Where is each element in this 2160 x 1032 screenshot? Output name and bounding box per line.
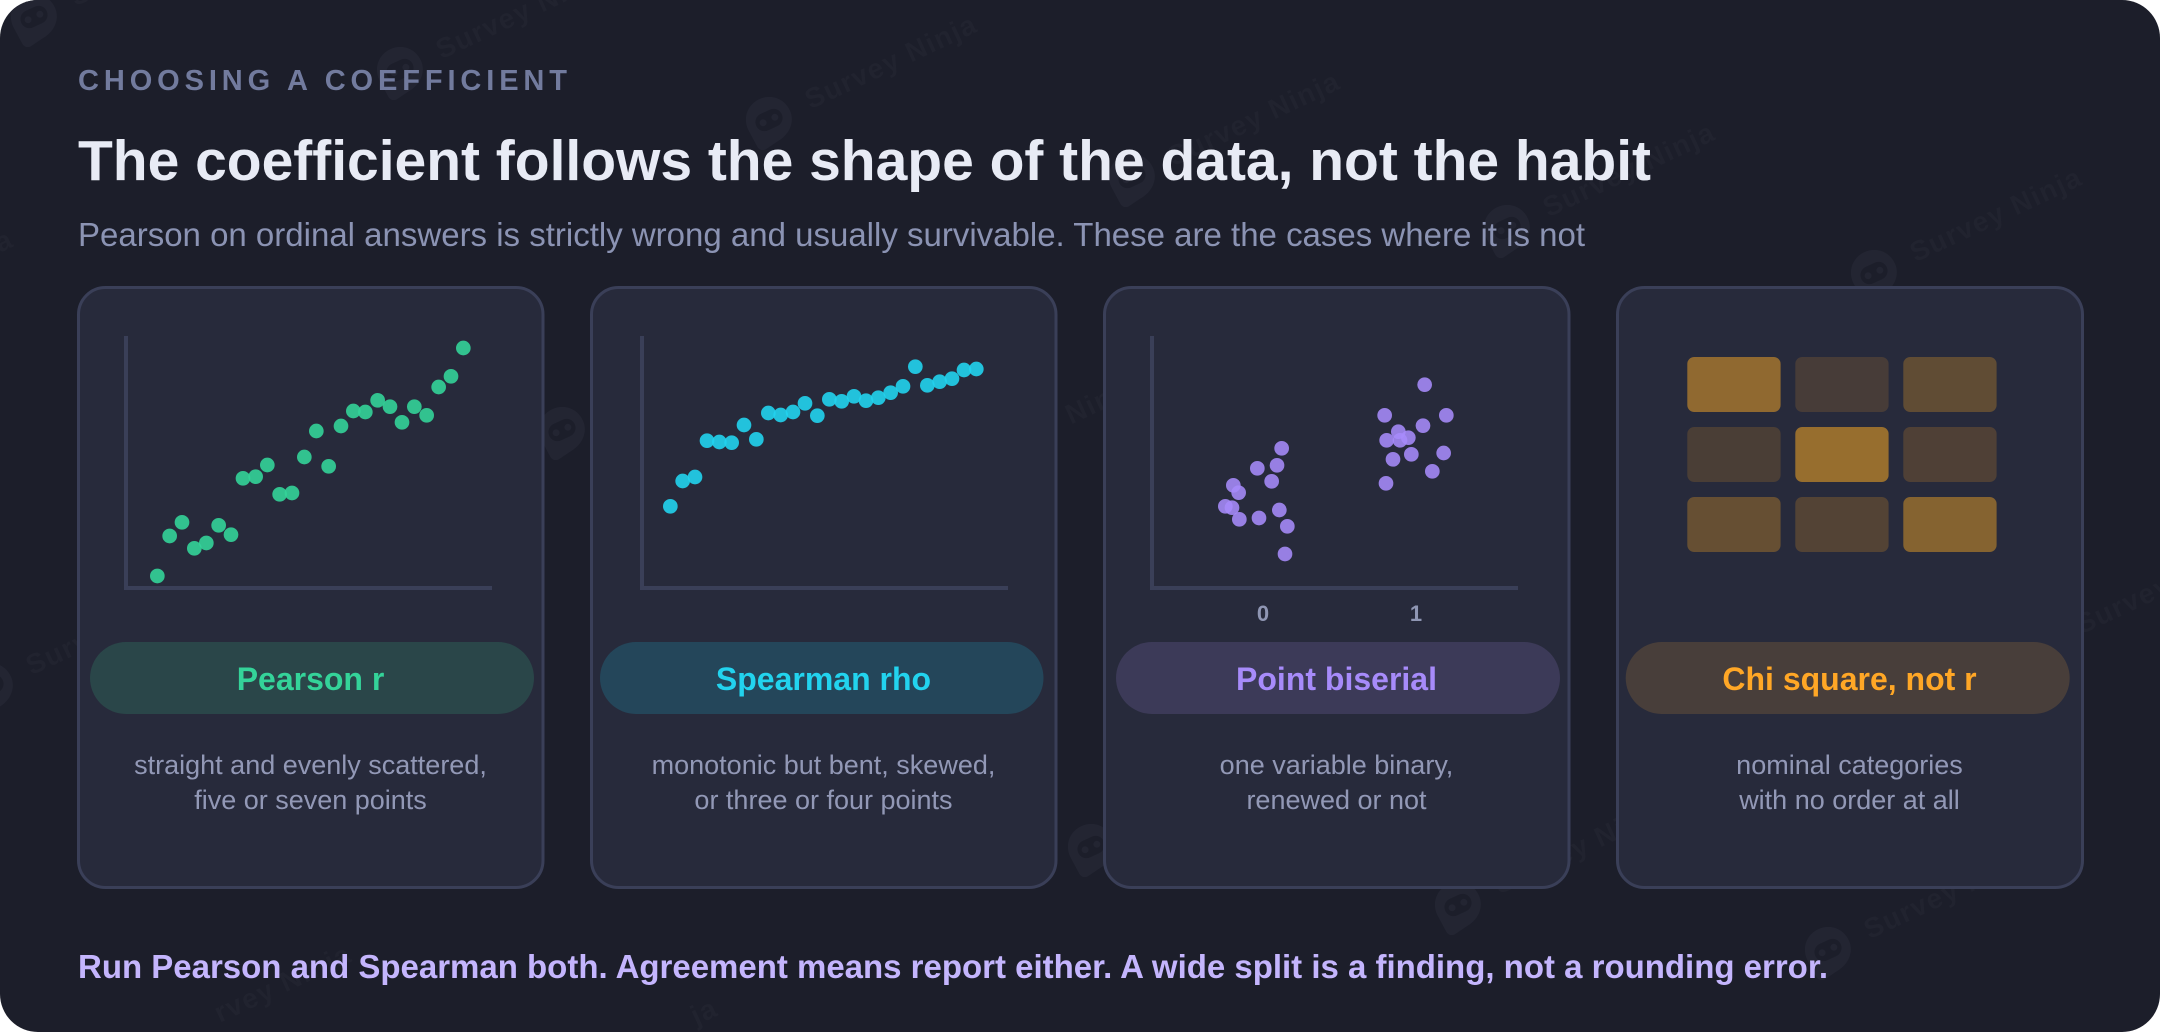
panel: spearman rho xyxy=(592,288,1056,888)
pill: pearson r: Pearson r xyxy=(237,661,384,697)
description: pearson r xyxy=(134,750,487,815)
watermark layer: Survey Ninja xyxy=(1163,65,1345,172)
pill: pearson r xyxy=(90,642,534,714)
panel: chi square xyxy=(1618,288,2082,888)
watermark layer: Survey Ninja xyxy=(593,318,775,425)
chart: two-group strip plot xyxy=(1152,336,1518,626)
watermark layer: Survey Ninja xyxy=(1122,735,1304,842)
watermark layer: Survey Ninja xyxy=(1905,161,2087,268)
chart: monotonic curve scatter xyxy=(642,336,1008,588)
description: point biserial xyxy=(1220,750,1453,815)
watermark layer: Survey Ninja xyxy=(960,370,1142,477)
pill: spearman rho xyxy=(600,642,1044,714)
chart: two-group strip plot: 1 xyxy=(1410,601,1422,626)
chart: linear scatter xyxy=(126,336,492,588)
chart: two-group strip plot: 0 xyxy=(1257,601,1269,626)
description: chi square: with no order at all xyxy=(1738,785,1960,815)
eyebrow: CHOOSING A COEFFICIENT xyxy=(78,65,567,97)
description: pearson r: five or seven points xyxy=(194,785,427,815)
footer takeaway: Run Pearson and Spearman both. Agreement means report either. A wide split is a finding, not a rounding error. xyxy=(78,948,1828,985)
description: pearson r: straight and evenly scattered, xyxy=(134,750,487,780)
watermark layer xyxy=(12,0,1448,713)
panel: point biserial xyxy=(1104,288,1569,888)
chart: contingency grid xyxy=(1687,357,1997,552)
pill: point biserial: Point biserial xyxy=(1236,661,1437,697)
description: point biserial: one variable binary, xyxy=(1220,750,1453,780)
watermark layer: Survey Ninja xyxy=(1489,793,1671,900)
description: point biserial: renewed or not xyxy=(1246,785,1427,815)
pill: chi square xyxy=(1626,642,2070,714)
description: spearman rho: or three or four points xyxy=(694,785,953,815)
pill: chi square: Chi square, not r xyxy=(1722,661,1977,697)
watermark layer: ja xyxy=(685,992,722,1031)
watermark layer: Survey Ninja xyxy=(21,574,203,681)
description: chi square xyxy=(1736,750,1963,815)
description: chi square: nominal categories xyxy=(1736,750,1963,780)
panel: pearson r xyxy=(78,288,543,888)
watermark layer: Survey Ninja xyxy=(1859,838,2041,945)
subtitle: Pearson on ordinal answers is strictly wrong and usually survivable. These are the cases where it is not xyxy=(78,216,1585,253)
pill: point biserial xyxy=(1116,642,1560,714)
pill: spearman rho: Spearman rho xyxy=(716,661,931,697)
title: The coefficient follows the shape of the data, not the habit xyxy=(78,129,1651,193)
watermark layer: Survey Ninja xyxy=(800,8,982,115)
description: spearman rho: monotonic but bent, skewed, xyxy=(652,750,995,780)
watermark layer: rvey Ninja xyxy=(209,938,356,1028)
watermark layer: Survey Ninja xyxy=(1538,116,1720,223)
description: spearman rho xyxy=(652,750,995,815)
